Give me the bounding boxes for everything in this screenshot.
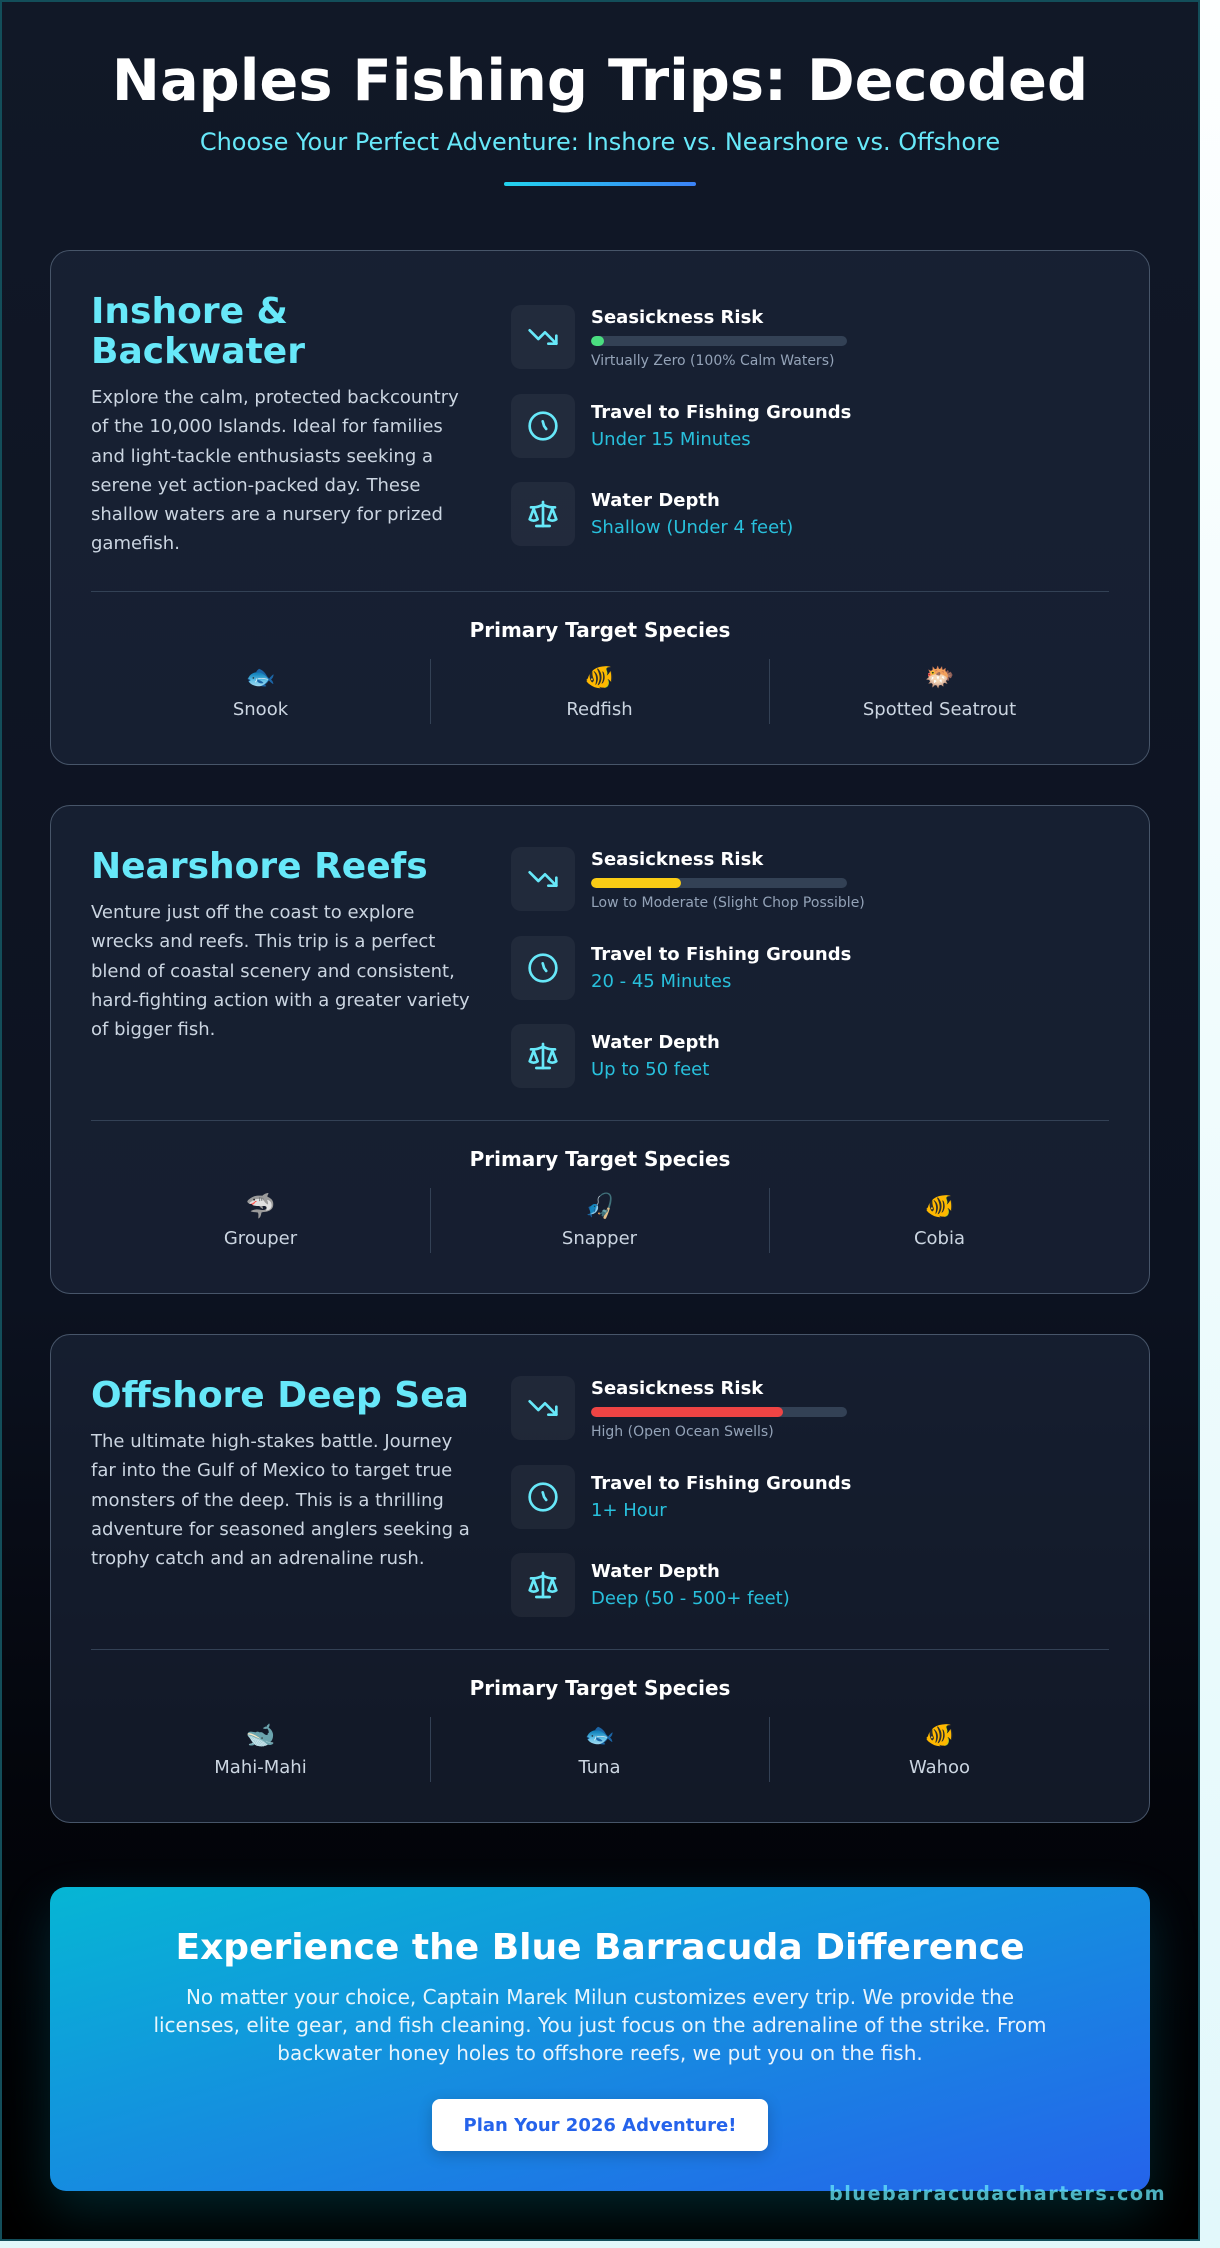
value: Shallow (Under 4 feet) <box>591 517 793 538</box>
icon: clock <box>511 936 575 1000</box>
description: inshore: shallow waters are a nursery for prized <box>91 504 443 525</box>
icon: scale <box>511 1553 575 1617</box>
species: cobia <box>914 1192 965 1249</box>
description: offshore: trophy catch and an adrenaline rush. <box>91 1548 425 1569</box>
species: snapper: Snapper <box>562 1228 637 1249</box>
accent underline <box>504 182 696 186</box>
text: call to action <box>153 1985 1047 2065</box>
label: Travel to Fishing Grounds <box>591 944 851 965</box>
description: offshore: far into the Gulf of Mexico to target true <box>91 1460 452 1481</box>
heading: offshore: Offshore Deep Sea <box>91 1375 469 1416</box>
text: call to action: No matter your choice, Captain Marek Milun customizes every trip. We provide the <box>186 1985 1014 2009</box>
label: Seasickness Risk <box>591 1378 763 1399</box>
heading: species: Primary Target Species <box>470 1147 730 1171</box>
value: Up to 50 feet <box>591 1059 709 1080</box>
stat: water depth <box>511 482 793 546</box>
species: cobia: Cobia <box>914 1228 965 1249</box>
species: redfish: Redfish <box>566 699 633 720</box>
species: wahoo: 🐠 <box>925 1721 954 1749</box>
heading: species: Primary Target Species <box>470 1676 730 1700</box>
description: nearshore: blend of coastal scenery and consistent, <box>91 960 455 982</box>
species: spotted seatrout <box>863 663 1016 720</box>
value: 20 - 45 Minutes <box>591 971 731 992</box>
heading: species: Primary Target Species <box>470 618 730 642</box>
description: inshore <box>91 387 459 554</box>
species: wahoo: Wahoo <box>909 1757 970 1778</box>
risk note: High (Open Ocean Swells) <box>591 1424 774 1440</box>
stat: seasickness risk <box>511 305 847 369</box>
description: nearshore: wrecks and reefs. This trip is a perfect <box>91 931 435 952</box>
risk bar <box>591 336 847 346</box>
species: snook: 🐟 <box>246 663 275 691</box>
label: Travel to Fishing Grounds <box>591 1473 851 1494</box>
heading: call to action: Experience the Blue Barracuda Difference <box>175 1927 1025 1968</box>
icon: trending down <box>511 305 575 369</box>
species: redfish <box>430 659 770 724</box>
label: Travel to Fishing Grounds <box>591 402 851 423</box>
species: mahi-mahi: Mahi-Mahi <box>214 1757 307 1778</box>
species: grouper: Grouper <box>224 1228 297 1249</box>
heading: inshore: Backwater <box>91 331 305 372</box>
panel: call to action <box>50 1887 1150 2191</box>
risk note: Virtually Zero (100% Calm Waters) <box>591 353 834 369</box>
description: inshore: gamefish. <box>91 533 180 554</box>
icon: trending down <box>511 847 575 911</box>
risk note: Low to Moderate (Slight Chop Possible) <box>591 895 865 911</box>
description: nearshore: Venture just off the coast to explore <box>91 902 414 923</box>
website url: bluebarracudacharters.com <box>829 2182 1166 2205</box>
stat: seasickness risk <box>511 847 865 911</box>
stat: travel time <box>511 936 851 1000</box>
species: mahi-mahi <box>91 1717 431 1782</box>
description: offshore: The ultimate high-stakes battle. Journey <box>91 1431 452 1452</box>
stat: travel time <box>511 394 851 458</box>
stat: travel time <box>511 1465 851 1529</box>
description: offshore: adventure for seasoned anglers seeking a <box>91 1519 470 1540</box>
species: snapper <box>430 1188 770 1253</box>
description: inshore: Explore the calm, protected backcountry <box>91 387 459 408</box>
stat: water depth <box>511 1024 720 1088</box>
value: Deep (50 - 500+ feet) <box>591 1588 790 1609</box>
description: inshore: and light-tackle enthusiasts seeking a <box>91 446 433 466</box>
species: snook: Snook <box>233 699 288 720</box>
title: Naples Fishing Trips: Decoded <box>112 47 1088 114</box>
species: tuna: 🐟 <box>585 1721 614 1749</box>
species: spotted seatrout: 🐡 <box>925 663 954 691</box>
risk bar <box>591 1407 847 1417</box>
icon: trending down <box>511 1376 575 1440</box>
label: Water Depth <box>591 490 720 511</box>
species: wahoo <box>909 1721 970 1778</box>
icon: clock <box>511 1465 575 1529</box>
species: tuna <box>430 1717 770 1782</box>
description: inshore: serene yet action-packed day. These <box>91 475 420 496</box>
subtitle: Choose Your Perfect Adventure: Inshore vs. Nearshore vs. Offshore <box>200 128 1000 156</box>
panel: offshore deep sea <box>50 1334 1150 1823</box>
description: nearshore <box>91 902 470 1040</box>
heading: inshore <box>91 291 305 372</box>
button <box>432 2099 768 2151</box>
species: cobia: 🐠 <box>925 1192 954 1220</box>
heading: inshore: Inshore & <box>91 291 288 332</box>
icon: clock <box>511 394 575 458</box>
panel: nearshore reefs <box>50 805 1150 1294</box>
icon: scale <box>511 482 575 546</box>
risk bar <box>591 878 847 888</box>
species: grouper <box>91 1188 431 1253</box>
value: Under 15 Minutes <box>591 429 751 450</box>
text: call to action: backwater honey holes to offshore reefs, we put you on the fish. <box>277 2041 923 2065</box>
stat: seasickness risk <box>511 1376 847 1440</box>
species: redfish: 🐠 <box>585 663 614 691</box>
text: call to action: licenses, elite gear, and fish cleaning. You just focus on the adrenaline of the strike. From <box>153 2013 1047 2037</box>
species: spotted seatrout: Spotted Seatrout <box>863 699 1016 720</box>
icon: scale <box>511 1024 575 1088</box>
species: snook <box>91 659 431 724</box>
description: offshore <box>90 1431 470 1569</box>
species: snapper: 🎣 <box>585 1192 614 1220</box>
label: Seasickness Risk <box>591 849 763 870</box>
species: mahi-mahi: 🐋 <box>246 1721 275 1749</box>
description: nearshore: of bigger fish. <box>91 1019 215 1040</box>
panel: inshore and backwater <box>50 250 1150 764</box>
description: inshore: of the 10,000 Islands. Ideal for families <box>91 416 443 437</box>
description: offshore: monsters of the deep. This is a thrilling <box>91 1490 444 1510</box>
description: nearshore: hard-fighting action with a greater variety <box>91 990 470 1011</box>
label: Seasickness Risk <box>591 307 763 328</box>
species: grouper: 🦈 <box>246 1192 275 1220</box>
species: tuna: Tuna <box>578 1757 621 1778</box>
button: Plan Your 2026 Adventure! <box>464 2115 736 2136</box>
heading: nearshore: Nearshore Reefs <box>91 846 428 887</box>
stat: water depth <box>511 1553 790 1617</box>
label: Water Depth <box>591 1032 720 1053</box>
value: 1+ Hour <box>591 1500 667 1521</box>
label: Water Depth <box>591 1561 720 1582</box>
